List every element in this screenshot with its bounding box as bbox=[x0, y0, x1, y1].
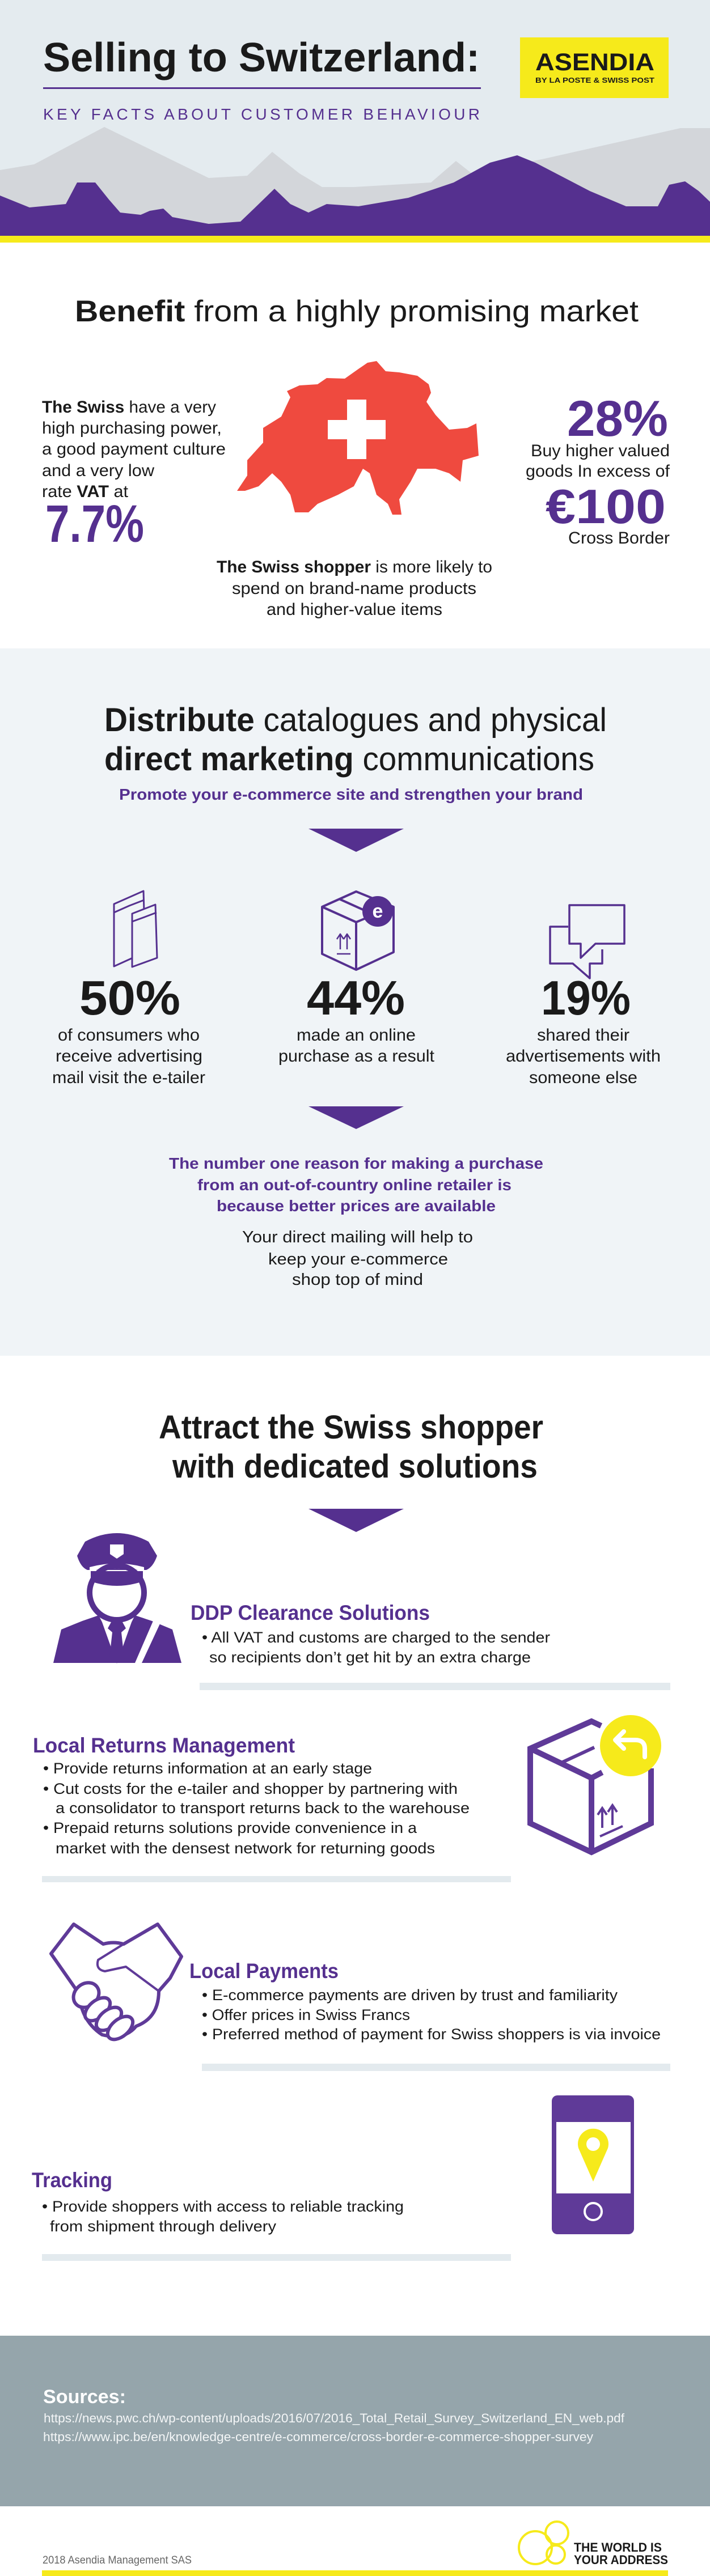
text block: returns bullets bbox=[43, 1760, 470, 1857]
text block: direct mailing: shop top of mind bbox=[292, 1271, 423, 1289]
text block: payments bullets: • E-commerce payments are driven by trust and familiarity bbox=[202, 1987, 618, 2004]
text block: direct mailing bbox=[242, 1228, 473, 1289]
icon: phone tracking bbox=[552, 2095, 634, 2234]
text block: swiss shopper: and higher-value items bbox=[267, 600, 442, 619]
stat: 28%: Buy higher valued bbox=[531, 442, 670, 460]
stat: 50%: receive advertising bbox=[56, 1047, 202, 1066]
heading: attract: with dedicated solutions bbox=[172, 1448, 538, 1485]
text block: DDP bullets bbox=[202, 1629, 550, 1666]
text block: purchasing power bbox=[42, 398, 226, 553]
title bbox=[43, 35, 481, 123]
text block: payments bullets bbox=[202, 1987, 661, 2043]
text block: tracking bullets bbox=[42, 2198, 404, 2235]
text block: swiss shopper bbox=[217, 558, 492, 619]
stat: 28%: Cross Border bbox=[568, 529, 670, 548]
stat: 19%: advertisements with bbox=[506, 1047, 661, 1066]
stat: 44% bbox=[278, 971, 435, 1066]
header background bbox=[0, 0, 710, 243]
stat: 50%: mail visit the e-tailer bbox=[52, 1068, 205, 1087]
heading: distribute: Distribute catalogues and physical bbox=[104, 702, 607, 739]
heading: attract: Attract the Swiss shopper bbox=[159, 1409, 543, 1446]
logo: Asendia: BY LA POSTE & SWISS POST bbox=[535, 76, 654, 84]
yellow strip bbox=[0, 236, 710, 243]
stat: 44%: made an online bbox=[297, 1026, 416, 1045]
stat: 19%: someone else bbox=[529, 1068, 637, 1087]
stat: 28% bbox=[526, 390, 670, 548]
text block: returns bullets: • Prepaid returns solutions provide convenience in a bbox=[43, 1819, 417, 1836]
panel: sources bbox=[0, 2336, 710, 2506]
icon: envelopes bbox=[114, 891, 157, 967]
stat: 28%: €100 bbox=[546, 480, 666, 534]
text block: payments bullets: • Offer prices in Swiss Francs bbox=[202, 2006, 410, 2023]
subtitle: promote: Promote your e-commerce site and strengthen your brand bbox=[119, 786, 583, 803]
icon: box with e bbox=[322, 892, 394, 970]
stat: 50%: 50% bbox=[79, 971, 180, 1025]
stat: 19%: shared their bbox=[537, 1026, 629, 1045]
logo: the world is your address bbox=[519, 2522, 668, 2567]
callout: number one reason bbox=[169, 1155, 543, 1215]
stat: 28%: goods In excess of bbox=[526, 462, 670, 481]
arrow: down bbox=[308, 829, 404, 852]
heading: tracking: Tracking bbox=[32, 2168, 112, 2192]
text block: payments bullets: • Preferred method of payment for Swiss shoppers is via invoice bbox=[202, 2026, 661, 2043]
callout: number one reason: The number one reason for making a purchase bbox=[169, 1155, 543, 1172]
text block: tracking bullets: • Provide shoppers with access to reliable tracking bbox=[42, 2198, 404, 2215]
icon: handshake bbox=[51, 1924, 181, 2044]
heading: benefit: Benefit from a highly promising market bbox=[75, 295, 639, 328]
mountains bbox=[0, 127, 710, 236]
arrow: down 3 bbox=[308, 1509, 404, 1532]
callout: number one reason: from an out-of-country online retailer is bbox=[197, 1176, 512, 1194]
heading: local payments: Local Payments bbox=[189, 1959, 339, 1983]
text block: purchasing power: 7.7% bbox=[45, 494, 144, 553]
panel: sources: https://www.ipc.be/en/knowledge-centre/e-commerce/cross-border-e-commerce-shopper-survey bbox=[43, 2430, 593, 2444]
text block: tracking bullets: from shipment through delivery bbox=[50, 2218, 277, 2235]
heading: local returns: Local Returns Management bbox=[33, 1734, 295, 1757]
map: Switzerland bbox=[237, 361, 479, 515]
arrow: down 2 bbox=[308, 1106, 404, 1129]
heading: DDP clearance: DDP Clearance Solutions bbox=[191, 1601, 430, 1624]
logo: the world is your address: YOUR ADDRESS bbox=[574, 2553, 668, 2567]
stat: 44%: 44% bbox=[307, 971, 405, 1025]
heading: attract bbox=[159, 1409, 543, 1485]
text block: DDP bullets: so recipients don’t get hit by an extra charge bbox=[209, 1649, 531, 1666]
footer: copyright: 2018 Asendia Management SAS bbox=[43, 2554, 192, 2566]
icon: customs officer bbox=[53, 1533, 181, 1663]
panel: sources: https://news.pwc.ch/wp-content/uploads/2016/07/2016_Total_Retail_Survey_Switzerland_EN_web.pdf bbox=[44, 2411, 625, 2425]
text block: returns bullets: a consolidator to transport returns back to the warehouse bbox=[56, 1800, 470, 1817]
stat: 44%: purchase as a result bbox=[278, 1047, 435, 1066]
heading: distribute: direct marketing communications bbox=[104, 741, 594, 778]
text block: returns bullets: market with the densest network for returning goods bbox=[56, 1840, 435, 1857]
stat: 19%: 19% bbox=[541, 971, 631, 1025]
text block: purchasing power: The Swiss have a very bbox=[42, 398, 216, 417]
text block: purchasing power: rate VAT at bbox=[42, 482, 129, 501]
logo: Asendia bbox=[520, 37, 669, 98]
text block: returns bullets: • Provide returns information at an early stage bbox=[43, 1760, 372, 1777]
stat: 50% bbox=[52, 971, 205, 1087]
text block: purchasing power: a good payment culture bbox=[42, 440, 226, 459]
text block: returns bullets: • Cut costs for the e-tailer and shopper by partnering with bbox=[43, 1780, 458, 1797]
heading: distribute bbox=[104, 702, 607, 778]
text block: swiss shopper: The Swiss shopper is more likely to bbox=[217, 558, 492, 576]
text block: purchasing power: and a very low bbox=[42, 461, 154, 480]
logo: the world is your address: THE WORLD IS bbox=[574, 2540, 662, 2554]
text block: direct mailing: Your direct mailing will help to bbox=[242, 1228, 473, 1246]
icon: box with e: e bbox=[373, 901, 383, 922]
text block: direct mailing: keep your e-commerce bbox=[268, 1250, 448, 1268]
title: KEY FACTS ABOUT CUSTOMER BEHAVIOUR bbox=[43, 105, 480, 123]
text block: swiss shopper: spend on brand-name products bbox=[232, 579, 476, 598]
text block: DDP bullets: • All VAT and customs are charged to the sender bbox=[202, 1629, 550, 1646]
icon: chat bubbles bbox=[550, 905, 624, 978]
callout: number one reason: because better prices are available bbox=[217, 1197, 496, 1215]
title: Selling to Switzerland: bbox=[43, 35, 480, 80]
panel: distribute section background bbox=[0, 648, 710, 1356]
stat: 28%: 28% bbox=[567, 390, 668, 447]
icon: returns box bbox=[530, 1715, 661, 1852]
stat: 19% bbox=[506, 971, 661, 1087]
panel: sources: Sources: bbox=[43, 2386, 126, 2408]
stat: 50%: of consumers who bbox=[58, 1026, 200, 1045]
logo: Asendia: ASENDIA bbox=[535, 49, 654, 76]
text block: purchasing power: high purchasing power, bbox=[42, 419, 222, 438]
